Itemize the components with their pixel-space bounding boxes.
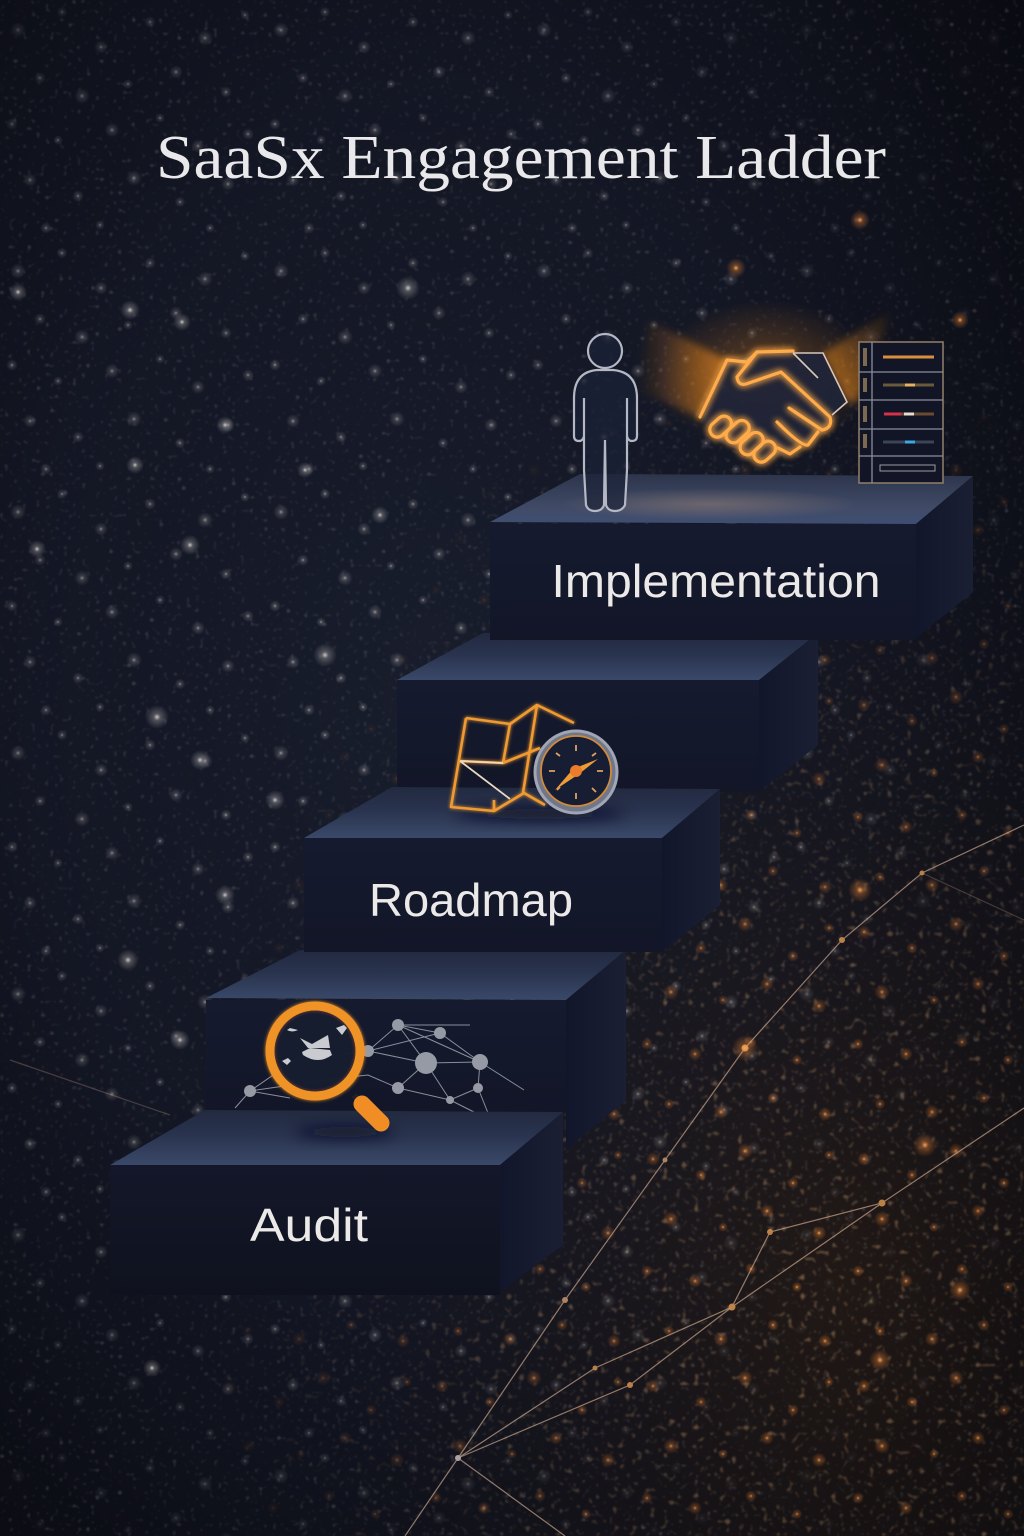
- icon: magnifier over network: [235, 1006, 524, 1120]
- label: implementation: Implementation: [552, 555, 880, 607]
- magnifier foreground handle: [295, 1095, 395, 1138]
- background: star glows: [9, 210, 971, 1377]
- network graph: [235, 1019, 524, 1120]
- compass: [534, 730, 618, 814]
- server indicators: [883, 357, 934, 442]
- step: audit riser (upper tier): [206, 950, 626, 1150]
- globe fragment: [282, 1025, 347, 1065]
- map outline: [451, 705, 574, 811]
- step: audit: [110, 1110, 563, 1295]
- shadow under icon: [455, 808, 625, 820]
- label: audit: Audit: [250, 1199, 368, 1251]
- magnifier lens: [270, 1006, 360, 1096]
- icon: map and compass: [451, 705, 625, 820]
- icon: person outline: [574, 334, 637, 511]
- label: roadmap: Roadmap: [369, 874, 573, 926]
- icon: server rack: [859, 342, 943, 483]
- handshake outline: [700, 351, 831, 465]
- compass needle: [555, 759, 598, 790]
- icon: glowing handshake: [637, 300, 893, 465]
- title: SaaSx Engagement Ladder: [156, 124, 886, 192]
- background: constellation network lines: [10, 825, 1024, 1536]
- step: roadmap riser (upper tier): [397, 633, 818, 792]
- right cuff: [793, 353, 847, 415]
- step: roadmap: [304, 787, 720, 952]
- light beams: [637, 320, 727, 417]
- step: implementation: [490, 474, 973, 640]
- hand fill: [700, 352, 847, 462]
